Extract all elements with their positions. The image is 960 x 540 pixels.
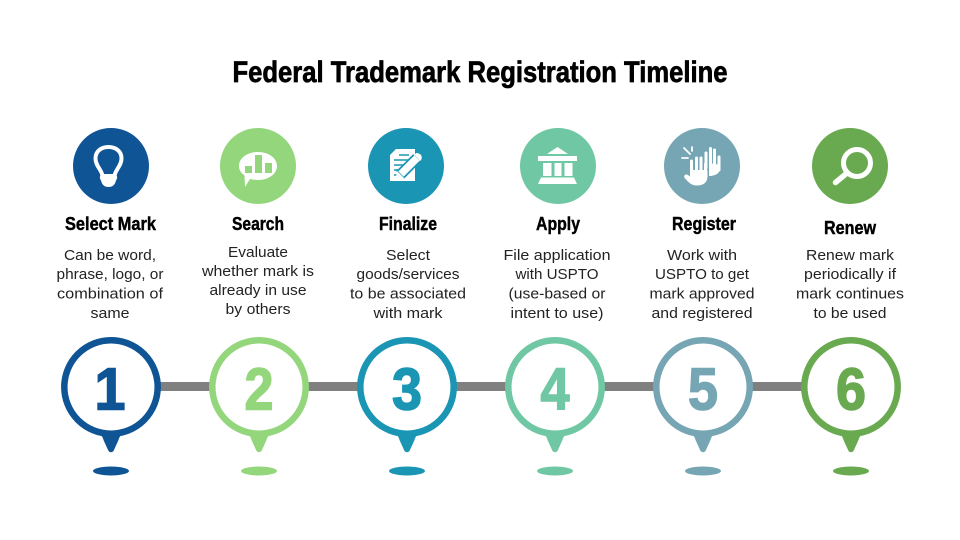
title: Federal Trademark Registration Timeline: [232, 56, 728, 89]
text: apply description: intent to use): [510, 305, 604, 322]
pin 6: 6: [836, 356, 866, 422]
text: renew description: Renew mark: [806, 247, 895, 264]
text: register description: mark approved: [650, 286, 754, 302]
text: select mark description: [56, 247, 164, 322]
text: search description: by others: [226, 301, 290, 318]
heading: register: Register: [672, 213, 736, 234]
heading: select mark: Select Mark: [65, 213, 157, 234]
pin 1: 1: [94, 356, 126, 422]
text: renew description: [796, 247, 904, 322]
step 6: renew: [796, 128, 904, 476]
heading: search: Search: [232, 213, 284, 234]
pin 2: 2: [244, 356, 274, 422]
text: finalize description: to be associated: [350, 286, 466, 302]
pin 1: [64, 340, 158, 476]
icon: document and pencil: [368, 128, 444, 204]
text: apply description: (use-based or: [508, 286, 606, 302]
step 1: select mark: [56, 128, 164, 476]
text: register description: and registered: [652, 305, 752, 322]
text: renew description: to be used: [814, 305, 886, 322]
step 4: apply: [504, 128, 610, 476]
step 5: register: [650, 128, 754, 476]
pin 4: [508, 340, 602, 476]
pin 6: [804, 340, 898, 476]
pin 5: 5: [688, 356, 718, 422]
pin 3: 3: [392, 356, 422, 422]
text: renew description: periodically if: [804, 266, 897, 283]
heading: renew: Renew: [824, 217, 877, 238]
pin 4: 4: [540, 356, 570, 422]
text: register description: [650, 247, 754, 322]
icon: chat bubble with bars: [220, 128, 296, 204]
text: search description: [201, 244, 314, 318]
icon: bank building: [520, 128, 596, 204]
timeline connector line: [150, 382, 810, 391]
text: search description: already in use: [210, 282, 306, 299]
text: finalize description: [350, 247, 466, 322]
text: select mark description: combination of: [57, 286, 164, 302]
text: apply description: [504, 247, 610, 322]
text: register description: USPTO to get: [655, 266, 750, 283]
heading: finalize: Finalize: [379, 213, 437, 234]
text: select mark description: phrase, logo, or: [56, 266, 164, 283]
step 2: search: [201, 128, 314, 476]
text: apply description: with USPTO: [514, 266, 598, 283]
heading: apply: Apply: [536, 213, 581, 234]
text: finalize description: goods/services: [356, 266, 460, 283]
text: select mark description: same: [90, 305, 130, 322]
step 3: finalize: [350, 128, 466, 476]
pin 5: [656, 340, 750, 476]
icon: light bulb: [73, 128, 149, 204]
pin 2: [212, 340, 306, 476]
pin 3: [360, 340, 454, 476]
text: finalize description: Select: [386, 247, 431, 264]
text: finalize description: with mark: [372, 305, 443, 322]
text: search description: whether mark is: [201, 263, 314, 280]
text: register description: Work with: [667, 247, 737, 264]
text: search description: Evaluate: [228, 244, 288, 261]
text: apply description: File application: [504, 247, 610, 264]
icon: high five hands: [664, 128, 740, 204]
icon: magnifying glass: [812, 128, 888, 204]
text: renew description: mark continues: [796, 286, 904, 302]
text: select mark description: Can be word,: [64, 247, 156, 264]
